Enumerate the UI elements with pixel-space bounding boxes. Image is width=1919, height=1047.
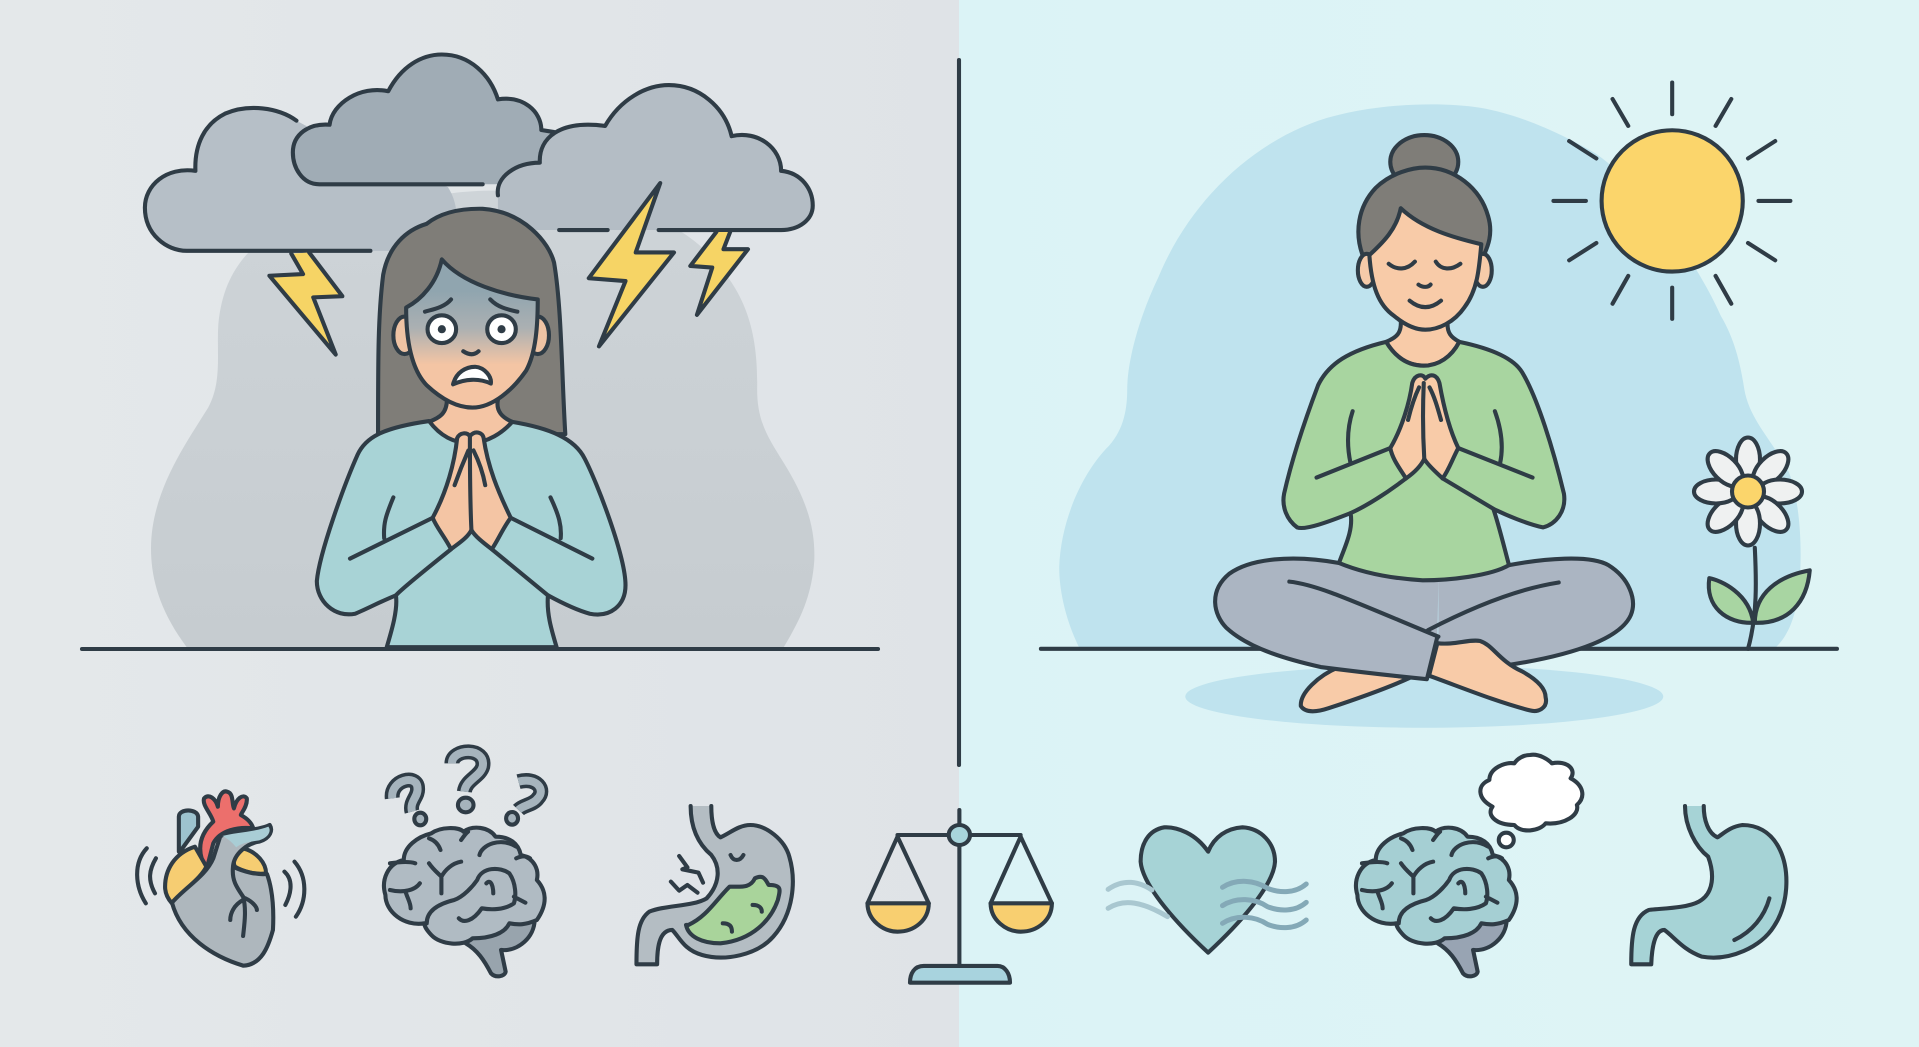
sweater (317, 421, 626, 647)
ground line: left (82, 647, 878, 651)
icon: confused brain with question marks (384, 752, 545, 976)
cloud: left (145, 108, 457, 251)
hair (1358, 168, 1490, 257)
crossed legs (1215, 559, 1633, 711)
icon: calm heart with waves (1108, 827, 1306, 953)
icon: daisy blossom (1694, 438, 1802, 546)
icon: calm brain (1356, 828, 1517, 976)
icon: healthy stomach (1631, 806, 1786, 964)
sun (1553, 83, 1790, 319)
ground line: right (1041, 647, 1837, 651)
sleeve lines (350, 497, 592, 595)
center divider (957, 60, 961, 765)
floor shadow (1185, 665, 1663, 728)
panel: calm background (959, 0, 1919, 1047)
sleeve lines (1317, 411, 1533, 513)
question marks (392, 752, 541, 825)
ears (393, 317, 549, 354)
hair (378, 209, 565, 434)
scene: anxious woman under storm clouds (145, 54, 814, 647)
green sweater (1283, 342, 1564, 580)
grey blob behind figure (151, 190, 814, 647)
icon: racing heart (137, 791, 304, 966)
icon: thought bubble (1480, 755, 1582, 847)
praying hands (433, 432, 511, 549)
lightning bolt: left (269, 252, 342, 355)
neck (1386, 320, 1459, 366)
cloud: middle (293, 54, 554, 184)
blue blob behind figure (1059, 104, 1801, 650)
panel: anxious background (0, 0, 959, 1047)
lightning bolt: small (690, 232, 748, 315)
neck (429, 399, 512, 444)
flower stem and leaves (1709, 548, 1810, 649)
serene face (1369, 208, 1481, 330)
worried face (406, 259, 538, 408)
scene: calm meditating woman (1041, 83, 1837, 728)
icon: balance scale (868, 810, 1052, 983)
cloud: right (498, 85, 813, 230)
lightning bolt: large (589, 183, 674, 346)
bun (1390, 135, 1458, 189)
praying hands (1390, 375, 1458, 478)
ears (1358, 254, 1492, 287)
icon: upset stomach (636, 806, 793, 964)
